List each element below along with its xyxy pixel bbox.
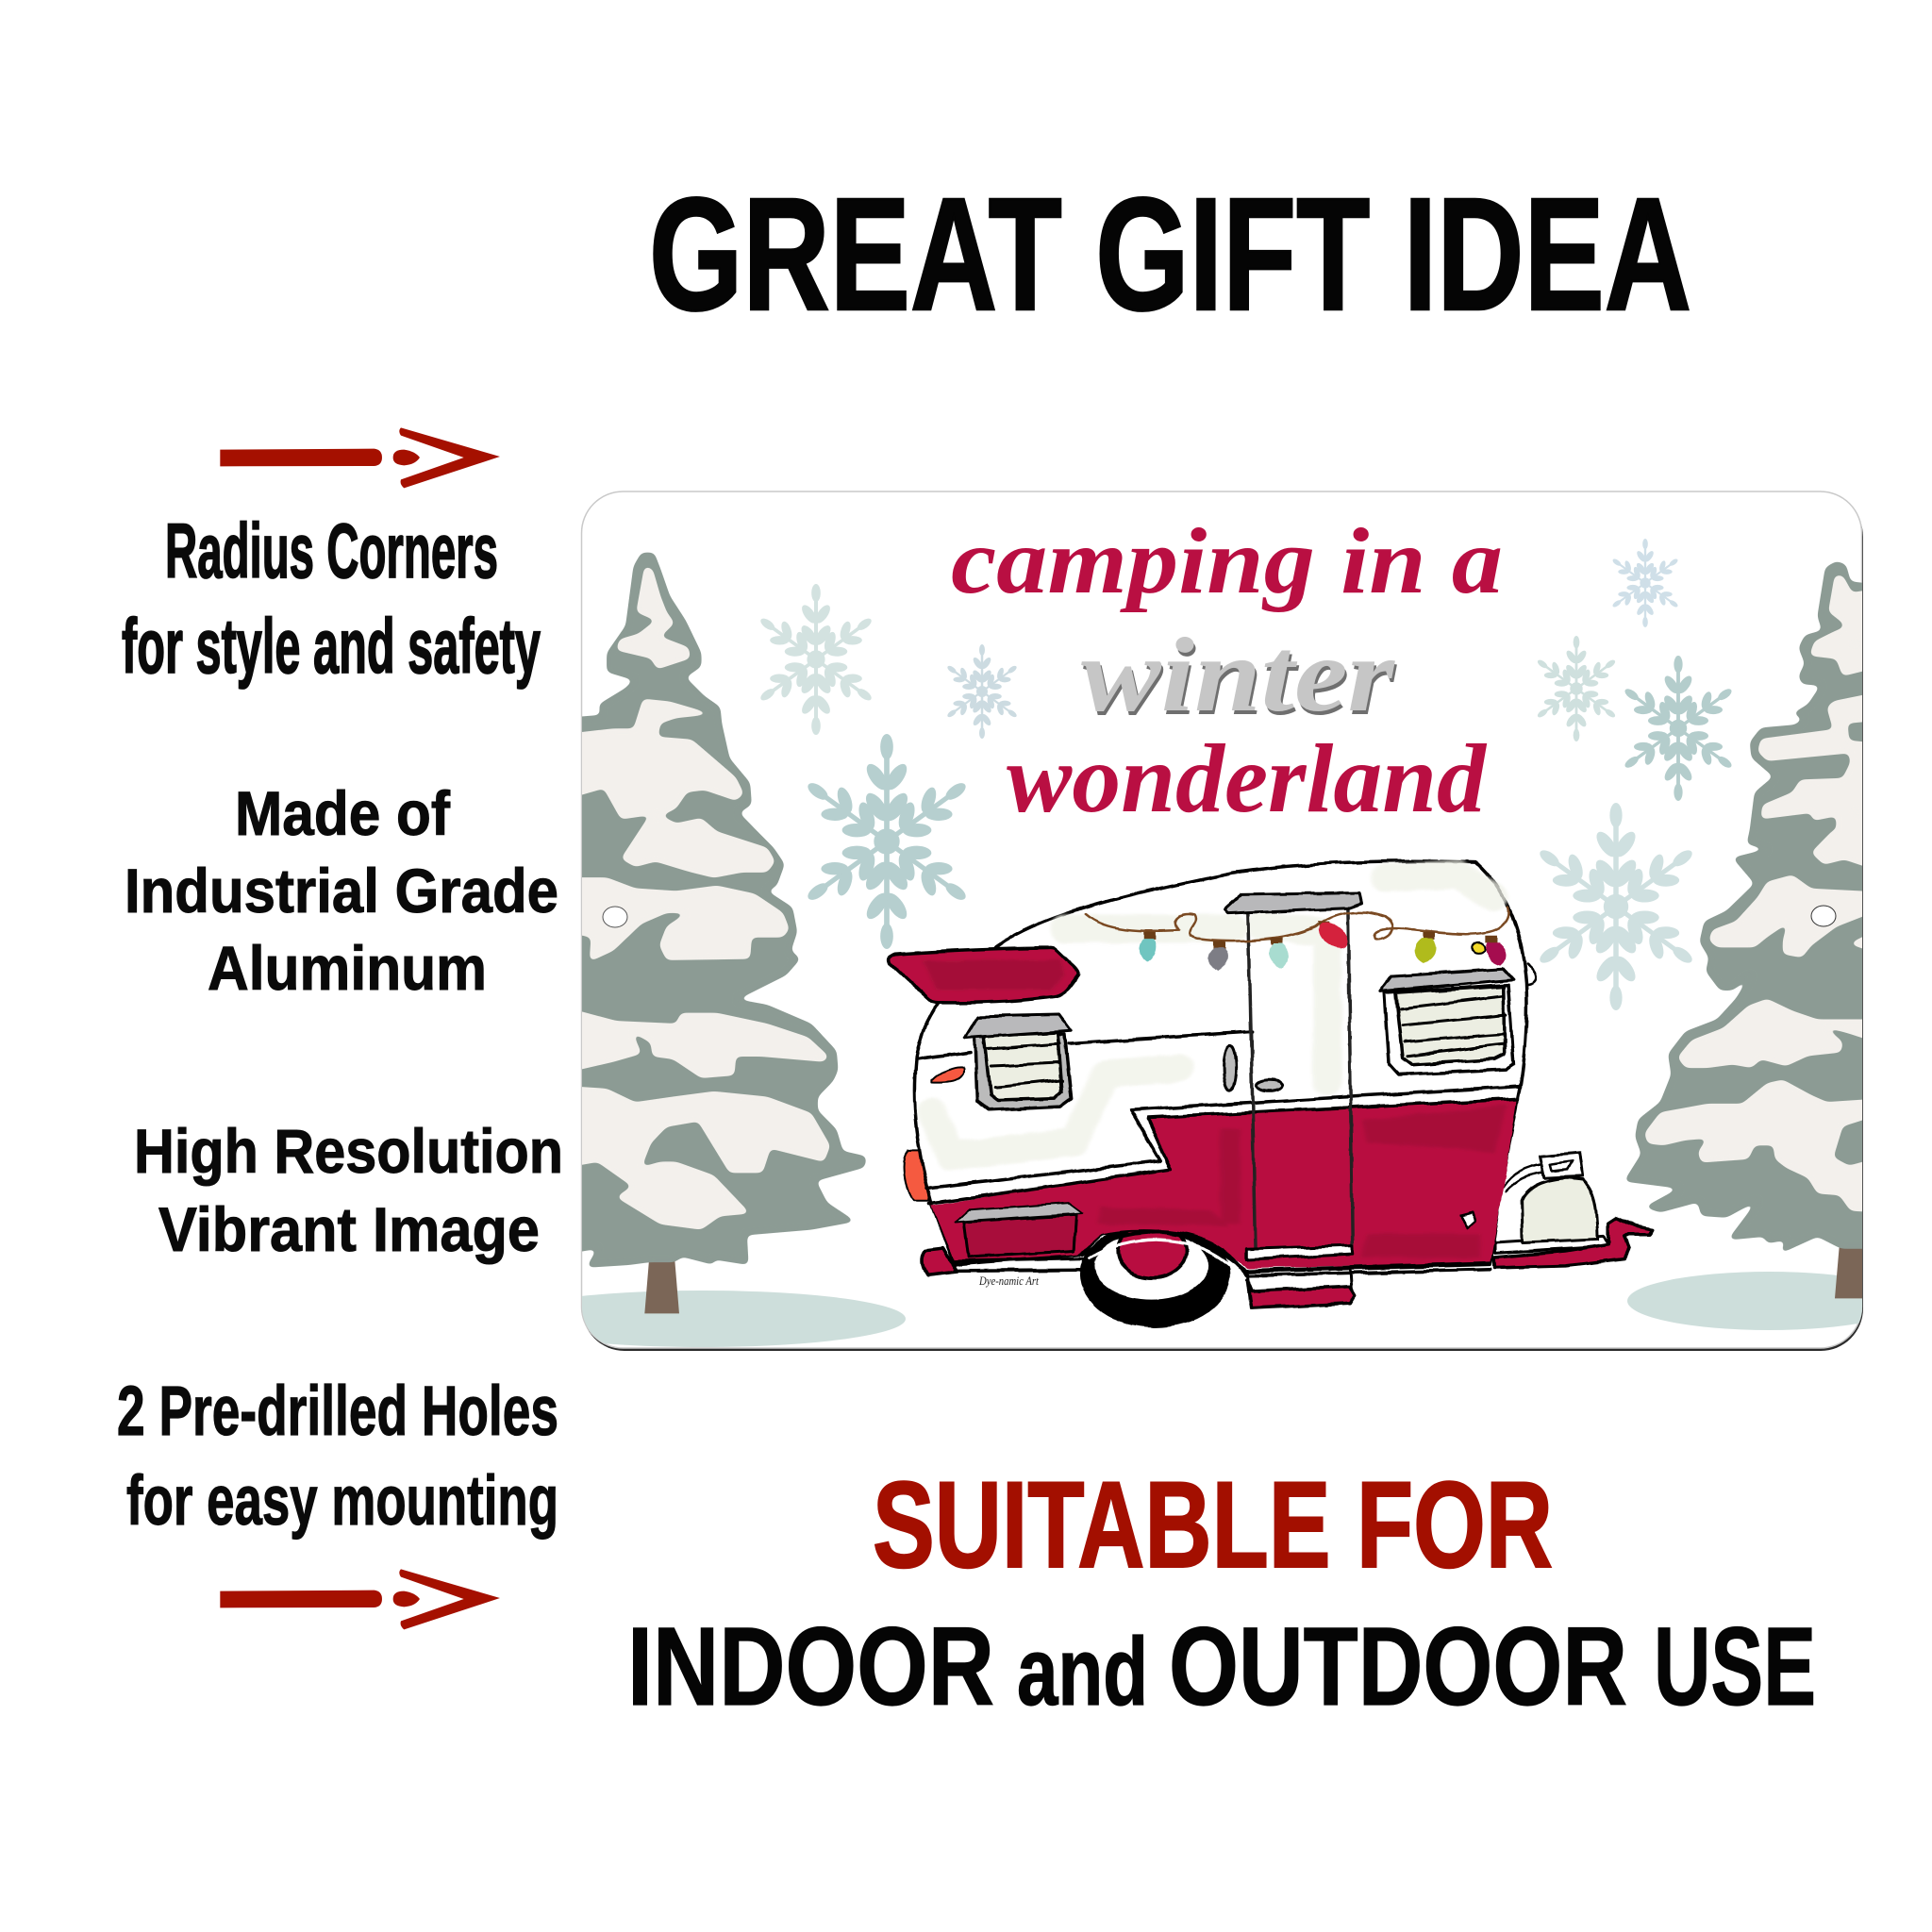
callout: pre-drilled holes: for easy mounting (126, 1461, 558, 1540)
red roof vent (890, 947, 1078, 1003)
lower red paint (932, 1098, 1517, 1268)
string lights (1085, 908, 1508, 972)
callout: aluminum: Industrial Grade (125, 856, 558, 925)
snowflakes (752, 539, 1740, 1010)
panel: metal sign (500, 491, 1910, 1351)
arrow: top (220, 427, 500, 488)
sign text: winter: winter (1081, 617, 1396, 734)
callout: radius corners: for style and safety (122, 604, 541, 690)
camper trailer (890, 861, 1653, 1327)
sign text: camping in a: camping in a (951, 508, 1503, 613)
trim lines (918, 1032, 1520, 1275)
callout: aluminum: Aluminum (208, 933, 487, 1003)
heading: indoor and outdoor use: and (1017, 1618, 1148, 1725)
heading: indoor and outdoor use: USE (1654, 1605, 1816, 1729)
tongue and hitch (1493, 1218, 1653, 1268)
door step (1247, 1268, 1356, 1308)
callout: high resolution: Vibrant Image (158, 1194, 540, 1264)
body shell (914, 861, 1526, 1272)
callout: radius corners (122, 508, 541, 690)
heading: indoor and outdoor use (627, 1605, 1816, 1729)
callout: high resolution: High Resolution (134, 1116, 563, 1186)
arrow: bottom (220, 1569, 500, 1629)
small outlet (1460, 1212, 1475, 1228)
heading: indoor and outdoor use: INDOOR (627, 1605, 994, 1729)
sign text: winter: winter (1083, 621, 1398, 738)
callout: aluminum: Made of (235, 778, 451, 848)
darker paint blotches (1096, 1105, 1508, 1257)
wheel (1079, 1222, 1230, 1327)
ground snow: right (1627, 1272, 1862, 1330)
tree: right (1624, 561, 1880, 1298)
door (1224, 893, 1361, 1259)
rear bumper (922, 1248, 958, 1274)
rear hook (1527, 964, 1536, 985)
propane tank (1504, 1153, 1598, 1242)
sign text: wonderland: wonderland (1007, 724, 1488, 833)
ground snow: left (582, 1291, 906, 1347)
mounting hole: left (603, 907, 627, 927)
heading: indoor and outdoor use: OUTDOOR (1169, 1605, 1627, 1729)
right window (1380, 969, 1513, 1074)
taillight (904, 1151, 929, 1201)
heading: suitable for: SUITABLE FOR (873, 1456, 1553, 1593)
callout: high resolution (134, 1116, 563, 1264)
callout: radius corners: Radius Corners (165, 508, 498, 594)
lower hatch (955, 1204, 1083, 1257)
sign text: winter (1081, 637, 1397, 715)
cream paint shading (932, 874, 1494, 1156)
tree: left (566, 553, 866, 1313)
mounting hole: right (1811, 906, 1836, 926)
marker light (932, 1067, 963, 1083)
callout: pre-drilled holes (117, 1372, 558, 1540)
left window (965, 1015, 1072, 1110)
callout: aluminum (125, 778, 558, 1003)
callout: pre-drilled holes: 2 Pre-drilled Holes (117, 1372, 558, 1450)
artist signature: Dye-namic Art (978, 1274, 1039, 1288)
